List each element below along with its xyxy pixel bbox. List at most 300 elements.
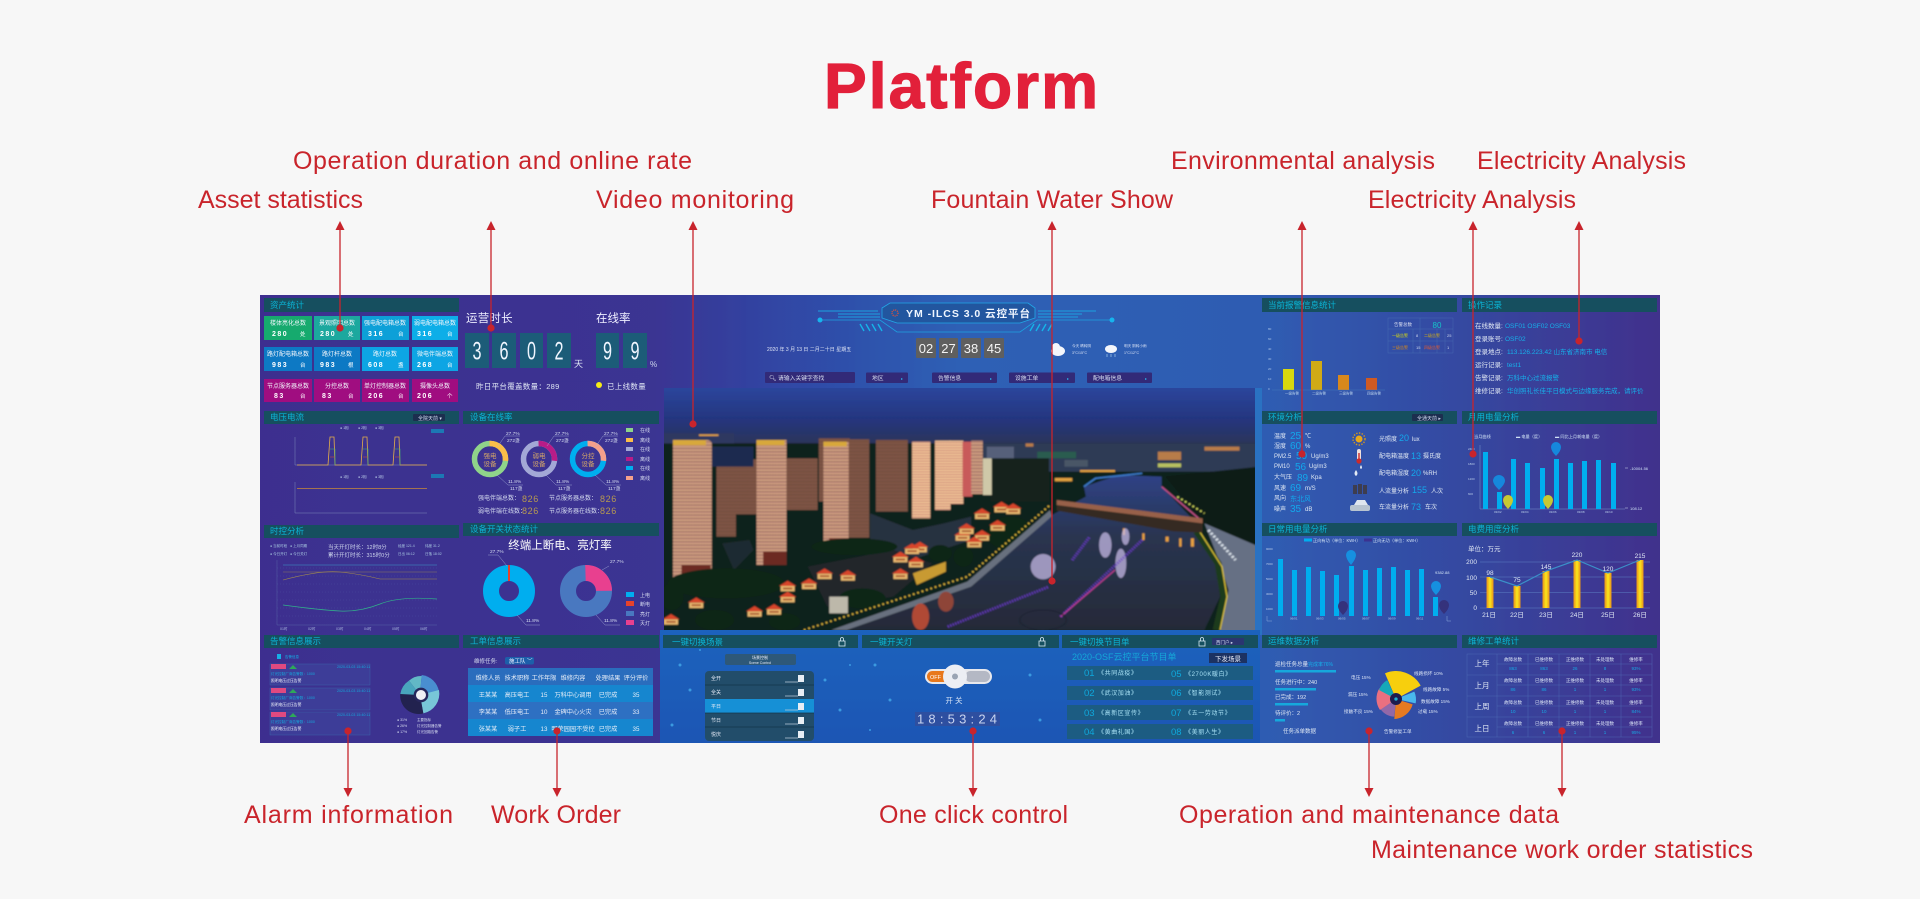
panel: operation duration and online rate: 9: [603, 338, 612, 366]
panel: environmental analysis: 20: [1411, 468, 1421, 478]
panel: device online rate: 弱电伴端在线数：: [478, 507, 526, 515]
panel: operation and maintenance data: 过载 15%: [1418, 708, 1438, 715]
panel: work order table: 维修任务:: [474, 657, 498, 665]
panel: scene switch: 悦庆: [711, 731, 721, 738]
panel: asset statistics: 983: [320, 362, 336, 369]
panel: maintenance work order statistics: 故障总数: [1504, 656, 1522, 663]
panel: work order table: 金碑中心火灾: [554, 708, 592, 716]
panel: alarm information: 告警信息: [285, 654, 299, 659]
panel: device online rate: 272盏: [605, 437, 618, 444]
panel: alarm information: 2020-03-03 15:40:11: [337, 689, 370, 693]
panel: operation duration and online rate: [465, 311, 657, 391]
panel: work order table: 弱子工: [508, 726, 526, 733]
panel: asset statistics: 206: [417, 393, 433, 400]
panel: time control analysis: 02时: [308, 626, 316, 631]
arrow: fountain water show: [1048, 221, 1056, 585]
panel: maintenance work order statistics: 84%: [1631, 709, 1641, 714]
panel: voltage and current chart: ● 3相: [375, 474, 384, 479]
panel: program list: 《2700K暖白》: [1185, 670, 1232, 678]
panel: current alarm statistics: [1262, 298, 1457, 396]
filter row: 设施工单: [1015, 374, 1038, 382]
panel: device online rate: 节点服务器总数：: [549, 494, 597, 502]
donut: weak current devices: [524, 444, 554, 474]
panel: environmental analysis: 89: [1297, 473, 1309, 484]
panel: daily electricity chart: 06/03: [1316, 616, 1324, 620]
lit towers: [673, 440, 992, 582]
panel: current alarm statistics: 20: [1268, 367, 1272, 371]
panel: maintenance work order statistics: [1462, 635, 1657, 737]
panel: operation records: 运行记录:: [1475, 360, 1503, 369]
panel: daily electricity chart: 06/11: [1416, 616, 1424, 620]
panel: operation duration and online rate: 天: [574, 359, 583, 369]
panel: scene switch: [660, 630, 1260, 743]
panel: device online rate: 27.7%: [604, 431, 618, 437]
panel: monthly electricity chart: 108.12: [1630, 506, 1643, 511]
panel: current alarm statistics: 二级告警: [1312, 390, 1326, 396]
panel: device online rate: 在线: [640, 427, 650, 434]
panel: operation and maintenance data: 线路故障 5%: [1423, 686, 1449, 693]
panel: device on-off status: 27.7%: [490, 549, 504, 555]
panel: alarm information: 灯光回路告警: [417, 729, 438, 734]
panel: operation duration and online rate: %: [650, 360, 657, 369]
panel: program list: 01: [1084, 668, 1095, 679]
panel: asset statistics: 台: [348, 392, 354, 400]
panel: alarm information: 2020-03-03 15:40:11: [337, 713, 370, 717]
panel: scene switch: Scene Control: [749, 661, 771, 665]
panel: electricity fee chart: 220: [1572, 552, 1583, 559]
panel: asset statistics: [264, 298, 459, 402]
panel: center header: [765, 303, 1152, 383]
panel: monthly electricity chart: ▬ 同比上月耗电量（度）: [1555, 433, 1602, 440]
panel: maintenance work order statistics: 正维修数: [1566, 677, 1584, 684]
arrow: video monitoring: [688, 221, 698, 428]
filter row: [765, 372, 1152, 383]
panel: alarm information: 灯光控制厂商告警数：1000: [271, 695, 315, 700]
panel: asset statistics: 摄像头总数: [420, 382, 450, 390]
panel: maintenance work order statistics: 95%: [1631, 730, 1641, 735]
panel: environmental analysis: 风向: [1274, 494, 1286, 502]
panel: daily electricity chart: 日常用电量分析: [1268, 524, 1328, 534]
panel: asset statistics: 台: [447, 361, 453, 369]
panel: electricity fee chart: [1462, 523, 1657, 619]
panel: environmental analysis: 60: [1290, 441, 1302, 452]
panel: device on-off status: [463, 523, 659, 627]
panel: voltage and current chart: ● 2相: [358, 474, 367, 479]
panel: operation duration and online rate: 9: [630, 338, 640, 366]
toggle switch: [925, 664, 992, 688]
panel: maintenance work order statistics: 10: [1510, 709, 1516, 714]
panel: alarm information: ● 26%: [397, 724, 407, 728]
panel: maintenance work order statistics: 故障总数: [1504, 720, 1522, 727]
panel: daily electricity chart: 3000: [1266, 592, 1273, 596]
bridge: [1057, 500, 1203, 533]
panel: maintenance work order statistics: 未处理数: [1596, 656, 1614, 663]
panel: current alarm statistics: 15: [1416, 345, 1421, 350]
panel: current alarm statistics: 0: [1268, 387, 1270, 391]
panel: asset statistics: 280: [272, 331, 288, 338]
panel: environmental analysis: ℃: [1305, 433, 1311, 440]
panel: device online rate: 离线: [640, 456, 650, 463]
panel: work order table: 已完成: [599, 691, 617, 699]
panel: alarm information: 2020-03-03 15:40:11: [337, 665, 370, 669]
panel: maintenance work order statistics: 93%: [1631, 687, 1641, 692]
icon: weather: 3°C/15°C: [1072, 351, 1087, 355]
panel: daily electricity chart: 06/07: [1362, 616, 1370, 620]
panel: maintenance work order statistics: 维修率: [1629, 699, 1643, 706]
icon: humidity drops: [1354, 465, 1362, 476]
panel: scene switch: 一键切换场景: [672, 637, 723, 647]
panel: environmental analysis: 13: [1411, 451, 1421, 461]
panel: device on-off status: 终端上断电、亮灯率: [508, 538, 612, 552]
panel: asset statistics: 83: [274, 393, 285, 400]
panel: maintenance work order statistics: 未处理数: [1596, 720, 1614, 727]
panel: maintenance work order statistics: 故障总数: [1504, 677, 1522, 684]
panel: program list: 《高新区宣传》: [1098, 709, 1144, 717]
banner: platform title: [818, 303, 1114, 332]
panel: electricity fee chart: 25日: [1601, 611, 1615, 619]
panel: maintenance work order statistics: 863: [1540, 666, 1548, 671]
panel: device online rate: 826: [522, 494, 539, 504]
panel: maintenance work order statistics: 维修工单统计: [1468, 636, 1520, 646]
panel: environmental analysis: %: [1305, 444, 1311, 450]
panel: alarm information: 灯光控制器告警: [417, 723, 442, 728]
label: maintenance work order statistics: Maintenance work order statistics: [1371, 836, 1753, 864]
panel: program list: 07: [1171, 708, 1182, 719]
panel: environmental analysis: 73: [1411, 502, 1421, 512]
panel: maintenance work order statistics: 1: [1574, 730, 1577, 735]
panel: maintenance work order statistics: 维修率: [1629, 677, 1643, 684]
panel: operation records: test1: [1507, 362, 1521, 369]
panel: daily electricity chart: 1000: [1266, 607, 1273, 611]
title: Platform: [824, 50, 1098, 122]
panel: environmental analysis: 25: [1290, 431, 1302, 442]
icon: weather: [1051, 343, 1147, 357]
panel: electricity fee chart: 单位：万元: [1468, 544, 1501, 553]
panel: device online rate: 11.8%: [556, 479, 570, 485]
panel: environmental analysis: Kpa: [1311, 475, 1322, 481]
label: electricity analysis upper: Electricity Analysis: [1477, 147, 1686, 175]
toggle switch: OFF: [930, 675, 942, 681]
panel: asset statistics: 处: [348, 330, 354, 338]
panel: operation and maintenance data: 数据故障 15%: [1421, 698, 1450, 705]
panel: asset statistics: 单灯控制器总数: [364, 382, 406, 390]
panel: operation records: 操作记录: [1468, 300, 1503, 310]
panel: environmental analysis: [1262, 411, 1457, 515]
panel: environmental analysis: 35: [1290, 504, 1302, 515]
panel: operation and maintenance data: 待评价：2: [1275, 709, 1300, 717]
panel: scene switch: 场景控制: [752, 654, 768, 660]
panel: environmental analysis: 155: [1412, 485, 1427, 495]
panel: asset statistics: 路灯配电箱总数: [267, 350, 309, 358]
panel: light switch: [862, 635, 1059, 731]
panel: device online rate: 设备在线率: [470, 412, 513, 422]
donut: weak current devices: 设备: [532, 459, 546, 468]
panel: electricity fee chart: 21日: [1482, 611, 1496, 619]
panel: asset statistics: 个: [447, 393, 453, 400]
panel: environmental analysis: 20: [1399, 433, 1409, 443]
panel: asset statistics: 983: [272, 362, 288, 369]
panel: time control analysis: ● 当前时段: [270, 543, 288, 548]
panel: maintenance work order statistics: 维修率: [1629, 720, 1643, 727]
panel: asset statistics: 路灯总数: [373, 350, 397, 358]
panel: device online rate: 117盏: [608, 485, 621, 492]
distant city: [660, 433, 1259, 502]
panel: maintenance work order statistics: 863: [1509, 666, 1517, 671]
panel: monthly electricity chart: 1200: [1468, 477, 1475, 481]
panel: asset statistics: 台: [300, 392, 306, 400]
panel: device online rate: 11.8%: [508, 479, 522, 485]
panel: daily electricity chart: 06/09: [1388, 616, 1396, 620]
panel: environmental analysis: 大气压: [1274, 473, 1292, 481]
panel: electricity fee chart: 23日: [1539, 611, 1553, 619]
panel: electricity fee chart: 75: [1513, 577, 1521, 584]
panel: device online rate: 节点服务器在线数：: [549, 507, 603, 515]
icon: lock: [1199, 638, 1205, 646]
brown background towers: [707, 438, 908, 538]
panel: operation and maintenance data: 完成率76%: [1308, 661, 1334, 668]
panel: time control analysis: [264, 525, 459, 631]
panel: work order table: 10: [541, 709, 548, 716]
panel: daily electricity chart: 5000: [1266, 577, 1273, 581]
panel: environmental analysis: 环境分析: [1268, 412, 1303, 422]
donut: power on or off: [491, 565, 527, 609]
panel: time control analysis: 04时: [364, 626, 372, 631]
panel: asset statistics: 盏: [398, 361, 404, 369]
panel: program list: 一键切换节目单: [1070, 637, 1130, 647]
panel: operation and maintenance data: 任务派单数据: [1283, 727, 1317, 735]
panel: operation and maintenance data: 电压 15%: [1351, 674, 1371, 681]
panel: current alarm statistics: 80: [1433, 321, 1442, 330]
panel: maintenance work order statistics: 6: [1543, 730, 1546, 735]
panel: maintenance work order statistics: 正维修数: [1566, 720, 1584, 727]
markers: chart pins: [1338, 550, 1449, 615]
donut: lights on or off: [568, 573, 604, 609]
panel: device online rate: 826: [600, 506, 617, 516]
panel: environmental analysis: PM10: [1274, 464, 1290, 470]
panel: alarm information: 照明电压过压告警: [271, 702, 302, 707]
panel: light switch: 开关: [946, 695, 964, 705]
panel: device on-off status: 亮灯: [640, 611, 650, 618]
panel: asset statistics: 根: [348, 361, 354, 369]
panel: maintenance work order statistics: 1: [1604, 709, 1607, 714]
panel: daily electricity chart: 正向有功（单位：KWH）: [1313, 537, 1360, 544]
panel: current alarm statistics: 告警总数: [1394, 321, 1412, 328]
panel: work order table: 李某某: [479, 708, 497, 716]
panel: current alarm statistics: 25: [1447, 333, 1452, 338]
filter row: ▸: [901, 376, 903, 381]
panel: maintenance work order statistics: 已维修数: [1535, 720, 1553, 727]
panel: maintenance work order statistics: 故障总数: [1504, 699, 1522, 706]
arrow: work order: [552, 727, 562, 797]
panel: work order table: 33: [633, 709, 640, 716]
panel: daily electricity chart: [1262, 523, 1457, 621]
panel: monthly electricity chart: 03/06: [1549, 510, 1557, 514]
filter row: 配电箱信息: [1093, 374, 1122, 382]
panel: time control analysis: 时控分析: [270, 526, 305, 536]
river: [847, 475, 1220, 630]
label: one click control: One click control: [879, 801, 1068, 829]
panel: maintenance work order statistics: 86: [1541, 687, 1547, 692]
panel: program list: 03: [1084, 708, 1095, 719]
panel: operation records: 华创照礼长佳平日模式与边缘服务完成，请评价: [1507, 386, 1644, 395]
panel: work order table: 施工队 ﹀: [509, 657, 533, 665]
panel: program list: 《美丽人生》: [1185, 728, 1225, 736]
panel: monthly electricity chart: 2400: [1468, 447, 1475, 451]
panel: monthly electricity chart: 1800: [1468, 462, 1475, 466]
panel: program list: 08: [1171, 727, 1182, 738]
panel: environmental analysis: 人次: [1431, 487, 1443, 495]
panel: asset statistics: 弱电配电箱总数: [414, 319, 456, 327]
panel: program list: 06: [1171, 688, 1182, 699]
arrow: environmental analysis: [1298, 221, 1306, 458]
panel: asset statistics: 83: [322, 393, 333, 400]
donut: sub-control devices: 设备: [582, 459, 595, 468]
panel: environmental analysis: 摄氏度: [1423, 452, 1441, 460]
panel: maintenance work order statistics: 6: [1512, 730, 1515, 735]
panel: environmental analysis: 人流量分析: [1379, 487, 1409, 495]
donut: strong current devices: 强电: [484, 451, 497, 460]
panel: current alarm statistics: 60: [1268, 337, 1272, 341]
panel: operation duration and online rate: 2: [554, 338, 564, 366]
panel: device online rate: 离线: [640, 437, 650, 444]
panel: operation records: 在线数量:: [1475, 321, 1503, 330]
panel: device on-off status: 11.8%: [604, 618, 618, 624]
panel: environmental analysis: 配电箱温度: [1379, 452, 1409, 460]
panel: asset statistics: 280: [320, 331, 336, 338]
panel: alarm information: 灯光控制厂商告警数：1000: [271, 719, 315, 724]
panel: work order table: 万科中心调用: [554, 691, 592, 699]
panel: current alarm statistics: 三级告警: [1339, 390, 1354, 396]
panel: environmental analysis: lux: [1412, 437, 1420, 443]
panel: work order table: 35: [633, 726, 640, 733]
panel: environmental analysis: %RH: [1423, 471, 1437, 477]
panel: device online rate: 272盏: [556, 437, 569, 444]
panel: device online rate: 27.7%: [555, 431, 569, 437]
panel: asset statistics: 强电配电箱总数: [364, 319, 406, 327]
panel: maintenance work order statistics: 1: [1574, 709, 1577, 714]
panel: operation records: 维修记录:: [1475, 386, 1503, 395]
panel: maintenance work order statistics: 已维修数: [1535, 677, 1553, 684]
panel: daily electricity chart: 06/01: [1290, 616, 1298, 620]
panel: alarm information: 灯光控制厂商告警数：1000: [271, 671, 315, 676]
panel: device online rate: 强电伴端总数：: [478, 494, 520, 502]
panel: time control analysis: 纬度 31.2: [425, 543, 440, 548]
panel: device online rate: 在线: [640, 465, 650, 472]
panel: monthly electricity chart: [1462, 411, 1657, 514]
panel: alarm information: ● 31%: [397, 718, 407, 722]
panel: device on-off status: 11.8%: [526, 618, 540, 624]
panel: monthly electricity chart: 当月曲线: [1474, 433, 1492, 440]
arrow: maintenance work order statistics: [1558, 727, 1566, 797]
panel: daily electricity chart: 9000: [1266, 547, 1273, 551]
panel: maintenance work order statistics: 1: [1574, 687, 1577, 692]
panel: voltage and current chart: ● 1相: [340, 425, 349, 430]
digital clock: 02: [919, 341, 933, 356]
houses: [662, 502, 1022, 625]
panel: program list: 02: [1084, 688, 1095, 699]
panel: monthly electricity chart: 03/10: [1605, 510, 1613, 514]
panel: device on-off status: 上电: [640, 592, 650, 599]
panel: operation duration and online rate: 0: [527, 338, 536, 366]
panel: monthly electricity chart: -10004.56: [1630, 466, 1649, 471]
panel: operation and maintenance data: 运维数据分析: [1268, 636, 1320, 646]
panel: time control analysis: 03时: [336, 626, 344, 631]
panel: environmental analysis: 湿度: [1274, 442, 1286, 450]
panel: maintenance work order statistics: 已维修数: [1535, 699, 1553, 706]
label: work order: Work Order: [491, 801, 621, 829]
panel: work order table: 13: [541, 726, 548, 733]
digital clock: 38: [964, 341, 978, 356]
panel: work order table: 王某某: [479, 691, 497, 699]
panel: environmental analysis: m/S: [1305, 486, 1316, 492]
panel: alarm information: 照明电压过压告警: [271, 726, 302, 731]
panel: center header: 2020 年 3 月 13 日 二月二十日 星期五: [767, 346, 851, 353]
panel: light switch: 一键开关灯: [870, 637, 913, 647]
panel: alarm information: 告警信息展示: [270, 636, 321, 646]
panel: maintenance work order statistics: 26: [1572, 666, 1578, 671]
panel: monthly electricity chart: 03/04: [1521, 510, 1529, 514]
arrow: operation and maintenance data: [1364, 727, 1374, 797]
panel: asset statistics: 316: [368, 331, 384, 338]
panel: asset statistics: 微电伴端总数: [417, 350, 453, 358]
panel: electricity fee chart: 120: [1603, 566, 1614, 573]
panel: environmental analysis: 全通天前 ▸: [1417, 415, 1441, 422]
panel: device online rate: 在线: [640, 446, 650, 453]
panel: current alarm statistics: 四级告警: [1367, 390, 1382, 396]
panel: device online rate: 826: [522, 506, 539, 516]
panel: device on-off status: 断电: [640, 601, 650, 608]
arrow: electricity analysis lower: [1468, 221, 1478, 458]
digital clock: 27: [941, 341, 956, 356]
icon: sun: [1353, 433, 1365, 445]
panel: work order table: 维修人员: [476, 674, 500, 682]
panel: voltage and current chart: [264, 411, 459, 513]
panel: work order table: 评分评价: [624, 674, 648, 682]
panel: environmental analysis: 车流量分析: [1379, 503, 1409, 511]
panel: program list: 《共同战疫》: [1098, 669, 1138, 677]
panel: operation duration and online rate: 6: [500, 338, 508, 366]
panel: electricity fee chart: 电费用度分析: [1468, 524, 1520, 534]
panel: time control analysis: ● 上月同期: [290, 543, 308, 548]
arrow: asset statistics: [336, 221, 344, 332]
panel: maintenance work order statistics: 维修率: [1629, 656, 1643, 663]
icon: weather: 明天 阴转小雨: [1124, 343, 1147, 348]
panel: program list: 2020-OSF云控平台节目单: [1072, 651, 1177, 662]
panel: monthly electricity chart: ▬ 电量（度）: [1516, 433, 1542, 440]
panel: work order table: 35: [633, 692, 640, 699]
feature labels: [198, 147, 1753, 864]
panel: operation and maintenance data: 漏压 15%: [1348, 691, 1368, 698]
panel: device online rate: 272盏: [507, 437, 520, 444]
panel: work order table: 高压电工: [505, 691, 529, 699]
panel: device online rate: 117盏: [558, 485, 571, 492]
panel: operation and maintenance data: 巡检任务总量: [1275, 660, 1309, 668]
panel: operation duration and online rate: 已上线数量: [607, 381, 646, 391]
panel: monthly electricity chart: 03/02: [1494, 510, 1502, 514]
label: operation duration and online rate: Operation duration and online rate: [293, 147, 692, 175]
panel: electricity fee chart: 215: [1635, 553, 1646, 560]
panel: work order table: 工作年限: [532, 674, 556, 682]
panel: work order table: 维修内容: [561, 674, 585, 682]
panel: work order table: 15: [541, 692, 548, 699]
panel: program list: 04: [1084, 727, 1095, 738]
panel: environmental analysis: 温度: [1274, 432, 1286, 440]
panel: maintenance work order statistics: 1: [1604, 687, 1607, 692]
panel: maintenance work order statistics: 未处理数: [1596, 699, 1614, 706]
arrow: one click control: [968, 727, 978, 797]
panel: time control analysis: 01时: [280, 626, 288, 631]
panel: asset statistics: 景观照明总数: [319, 319, 355, 327]
